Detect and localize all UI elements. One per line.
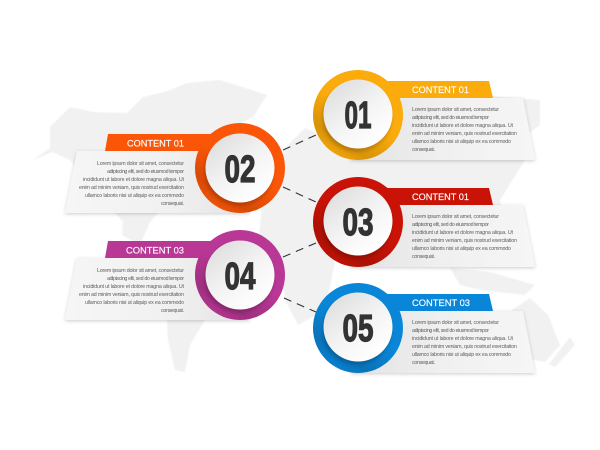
panel: step 03 (313, 177, 535, 267)
body text: adipiscing elit, sed do eiusmod tempor (107, 276, 184, 282)
text card (350, 311, 535, 373)
heading banner (370, 188, 493, 205)
map: Indonesia (450, 268, 535, 295)
body text: Lorem ipsum dolor sit amet, consectetur (97, 161, 184, 167)
body text: adipiscing elit, sed do eiusmod tempor (412, 115, 489, 121)
body text: adipiscing elit, sed do eiusmod tempor (412, 328, 489, 334)
body text: enim ad minim veniam, quis nostrud exercitation (412, 344, 517, 350)
panel: step 01 (313, 70, 535, 160)
number circle: 04 (224, 256, 256, 298)
number circle: 05 (342, 308, 374, 350)
body text (412, 214, 517, 260)
body text: incididunt ut labore et dolore magna aliqua. Ut (412, 123, 514, 129)
map: Asia (320, 90, 540, 250)
number circle (195, 230, 285, 320)
heading: CONTENT 01 (127, 139, 184, 150)
panel: step 02 (65, 123, 285, 213)
text card (350, 205, 535, 267)
number circle (313, 177, 403, 267)
connector: 04 to 03 (283, 243, 316, 257)
body text (412, 320, 517, 366)
body text: adipiscing elit, sed do eiusmod tempor (107, 169, 184, 175)
map: South America (150, 245, 212, 372)
body text: consequat. (161, 201, 184, 207)
body text (79, 161, 185, 207)
body text: adipiscing elit, sed do eiusmod tempor (412, 222, 489, 228)
text card (350, 98, 535, 160)
body text: incididunt ut labore et dolore magna aliqua. Ut (83, 284, 185, 290)
body text: ullamco laboris nisi ut aliquip ex ea commodo (85, 300, 184, 306)
body text: consequat. (412, 360, 435, 366)
map: New Zealand (549, 337, 575, 367)
text card (65, 258, 250, 320)
body text: consequat. (161, 308, 184, 314)
body text: incididunt ut labore et dolore magna aliqua. Ut (412, 336, 514, 342)
heading banner (105, 134, 230, 151)
panel: step 04 (65, 230, 285, 320)
body text: enim ad minim veniam, quis nostrud exercitation (412, 238, 517, 244)
panel: step 05 (313, 283, 535, 373)
connector: 04 to 05 (284, 298, 316, 312)
map: Europe and Africa (258, 125, 345, 325)
body text (412, 107, 517, 153)
body text: incididunt ut labore et dolore magna aliqua. Ut (412, 230, 514, 236)
body text: enim ad minim veniam, quis nostrud exercitation (79, 185, 184, 191)
heading banner (105, 241, 230, 258)
connector: 02 to 01 (283, 135, 316, 150)
body text: consequat. (412, 254, 435, 260)
heading: CONTENT 01 (412, 192, 469, 203)
number circle: 01 (344, 95, 372, 137)
text card (65, 151, 250, 213)
dashed connectors (283, 135, 316, 312)
map: North America and Greenland (33, 80, 267, 245)
body text: Lorem ipsum dolor sit amet, consectetur (412, 214, 499, 220)
number circle: 02 (224, 149, 256, 191)
number circle: 03 (342, 202, 374, 244)
body text: Lorem ipsum dolor sit amet, consectetur (412, 320, 499, 326)
heading banner (370, 81, 493, 98)
heading: CONTENT 03 (412, 298, 470, 309)
number circle (195, 123, 285, 213)
map: Australia (505, 298, 560, 362)
body text: Lorem ipsum dolor sit amet, consectetur (97, 268, 184, 274)
body text: ullamco laboris nisi ut aliquip ex ea commodo (412, 246, 511, 252)
body text: incididunt ut labore et dolore magna aliqua. Ut (83, 177, 185, 183)
body text: Lorem ipsum dolor sit amet, consectetur (412, 107, 499, 113)
body text: consequat. (412, 147, 435, 153)
body text: ullamco laboris nisi ut aliquip ex ea commodo (85, 193, 184, 199)
number circle (313, 283, 403, 373)
heading: CONTENT 03 (126, 246, 184, 257)
body text: ullamco laboris nisi ut aliquip ex ea commodo (412, 139, 511, 145)
heading banner (370, 294, 493, 311)
number circle (313, 70, 403, 160)
body text: ullamco laboris nisi ut aliquip ex ea commodo (412, 352, 511, 358)
heading: CONTENT 01 (412, 85, 469, 96)
connector: 02 to 03 (283, 187, 316, 202)
body text (79, 268, 185, 314)
body text: enim ad minim veniam, quis nostrud exercitation (412, 131, 517, 137)
world map background (33, 80, 575, 372)
body text: enim ad minim veniam, quis nostrud exercitation (79, 292, 184, 298)
